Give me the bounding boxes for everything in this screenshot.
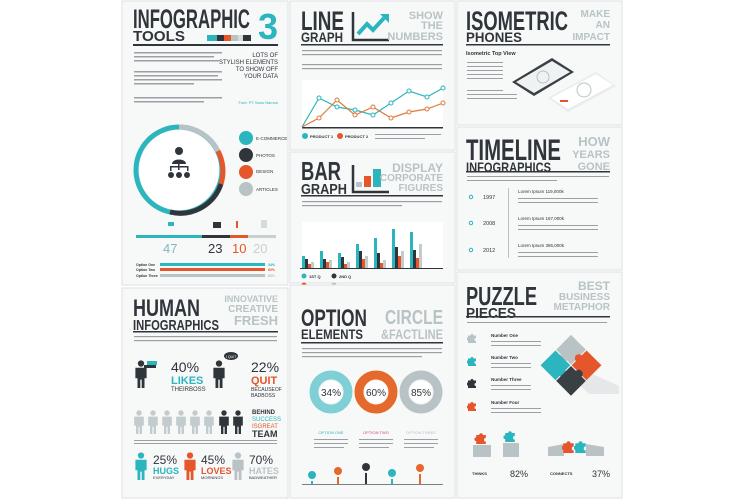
heading: &FACTLINE <box>381 326 443 342</box>
hands: connects: 37% <box>592 469 610 479</box>
panel: line graph <box>290 1 455 150</box>
panel: infographic tools <box>122 1 288 285</box>
heading: BUSINESS <box>559 292 610 303</box>
stat: quit <box>213 352 282 399</box>
heading: GRAPH <box>301 29 343 45</box>
option labels: OPTION THREE <box>406 430 436 435</box>
heading: OPTION <box>301 305 367 332</box>
heading: DISPLAY <box>392 161 443 175</box>
stats row: BADWEATHER <box>249 475 277 480</box>
stats row: MORNINGS <box>201 475 223 480</box>
timeline entries: Lorem Ipsum 187,000k <box>518 216 565 221</box>
stat: likes <box>135 359 206 393</box>
stats row: 70% <box>249 453 273 467</box>
stat bar <box>136 220 276 256</box>
heading: CORPORATE <box>380 173 443 184</box>
stat bar: 10 <box>232 241 246 256</box>
option bars: 85% <box>268 274 276 278</box>
stat: quit: QUIT <box>251 375 278 387</box>
heading: INFOGRAPHICS <box>133 317 219 334</box>
option labels <box>314 430 438 448</box>
timeline entries <box>469 188 598 258</box>
option bars <box>136 263 276 278</box>
heading <box>301 156 443 198</box>
heading <box>466 279 611 322</box>
heading: CIRCLE <box>385 307 443 329</box>
stat bar: 20 <box>253 241 267 256</box>
stat bar: 23 <box>208 241 222 256</box>
bar chart <box>300 222 443 269</box>
heading: PUZZLE <box>466 281 537 311</box>
stat: likes: 40% <box>171 359 199 375</box>
option bars: Option Three <box>136 274 158 278</box>
heading: IMPACT <box>572 32 610 43</box>
heading: INNOVATIVE <box>224 294 278 304</box>
legend: PRODUCT 2 <box>345 134 369 139</box>
heading: ELEMENTS <box>301 326 363 342</box>
title <box>133 4 278 47</box>
stats row: 25% <box>153 453 177 467</box>
hands: thinks: 82% <box>510 469 528 479</box>
team row: BEHIND <box>252 410 276 416</box>
color swatches <box>207 35 251 41</box>
stat: likes: LIKES <box>171 375 203 387</box>
stats row <box>135 452 279 480</box>
puzzle list: Number Four <box>491 400 519 405</box>
option bars: 34% <box>268 263 276 267</box>
heading: NUMBERS <box>387 31 443 43</box>
legend: PRODUCT 1 <box>310 134 334 139</box>
team row: ISGREAT <box>252 424 278 430</box>
heading <box>133 294 278 334</box>
heading: AN <box>596 20 610 31</box>
panel: isometric phones <box>457 1 622 125</box>
heading: PIECES <box>466 305 516 322</box>
donuts: 85% <box>411 388 431 399</box>
tagline: LOTS OF <box>252 53 278 59</box>
heading: METAPHOR <box>554 302 611 313</box>
heading: CREATIVE <box>228 304 278 315</box>
hands: connects: CONNECTS <box>550 471 573 476</box>
puzzle list: Number Three <box>491 377 522 382</box>
legend icons: ARTICLES <box>256 187 278 192</box>
heading: SHOW <box>409 10 444 22</box>
hands: thinks <box>472 431 528 479</box>
donuts: 34% <box>321 388 341 399</box>
hands: connects <box>548 441 610 479</box>
legend: 2ND Q <box>339 274 351 279</box>
big puzzle <box>540 327 632 419</box>
heading: FRESH <box>234 313 278 328</box>
team row: TEAM <box>252 429 278 439</box>
panel: timeline <box>457 127 622 270</box>
legend <box>302 274 351 288</box>
heading: HOW <box>578 134 611 149</box>
stats row: EVERYDAY <box>153 475 175 480</box>
title: 3 <box>258 6 278 47</box>
stat: likes: THEIRBOSS <box>171 387 206 393</box>
legend icons: DESIGN <box>256 169 273 174</box>
phones <box>512 58 616 112</box>
stat: quit: BECAUSEOF <box>251 387 282 393</box>
tagline: STYLISH ELEMENTS <box>219 60 278 66</box>
heading: FIGURES <box>399 183 443 194</box>
heading: ISOMETRIC <box>466 6 568 36</box>
panel: option elements <box>290 285 455 498</box>
stat bar: 47 <box>163 241 177 256</box>
heading: YEARS <box>572 149 610 161</box>
panel: isometric phones: Isometric Top View <box>466 51 516 57</box>
stat: quit: I QUIT <box>226 355 237 359</box>
legend icons: E-COMMERCE <box>256 136 287 141</box>
option labels: OPTION ONE <box>318 430 344 435</box>
option bars: Option One <box>136 263 155 267</box>
legend: 1ST Q <box>309 274 321 279</box>
puzzle list: Number Two <box>491 355 518 360</box>
puzzle list <box>466 333 541 413</box>
tagline: Font: PT Sans Narrow <box>238 100 278 105</box>
ring chart <box>136 127 223 213</box>
stats row: LOVES <box>201 466 232 476</box>
stats row: 45% <box>201 453 225 467</box>
heading: INFOGRAPHICS <box>466 159 551 175</box>
legend <box>302 133 441 139</box>
heading <box>301 6 444 45</box>
donuts <box>314 375 438 409</box>
stat: quit: 22% <box>251 359 279 375</box>
heading: MAKE <box>581 9 610 20</box>
option labels: OPTION TWO <box>363 430 389 435</box>
legend: 4TH Q <box>339 283 351 288</box>
line chart <box>302 80 445 128</box>
stat: quit: BADBOSS <box>251 393 276 399</box>
heading <box>301 305 443 342</box>
legend: 3RD Q <box>309 283 321 288</box>
legend icons <box>239 131 287 196</box>
timeline entries: 1997 <box>483 195 495 201</box>
heading: BAR <box>301 156 341 186</box>
hands: thinks: THINKS <box>472 471 487 476</box>
timeline entries: Lorem Ipsum 386,000k <box>518 243 565 248</box>
legend icons: PHOTOS <box>256 153 275 158</box>
tagline: YOUR DATA <box>244 74 278 80</box>
panel: puzzle pieces <box>457 272 632 498</box>
donuts: 60% <box>366 388 386 399</box>
option bars: 60% <box>268 268 276 272</box>
puzzle list: Number One <box>491 333 519 338</box>
timeline entries: Lorem Ipsum 119,000k <box>518 189 564 194</box>
timeline entries: 2012 <box>483 248 495 254</box>
heading: BEST <box>578 279 611 293</box>
option bars: Option Two <box>136 268 155 272</box>
tagline: TO SHOW OFF <box>236 67 278 73</box>
heading: LINE <box>301 6 344 36</box>
heading: TIMELINE <box>466 134 561 167</box>
heading: HUMAN <box>133 295 200 322</box>
panel: bar graph <box>290 152 455 288</box>
heading: PHONES <box>466 29 522 45</box>
tagline <box>219 53 278 105</box>
heading: GRAPH <box>301 181 347 198</box>
stats row: HUGS <box>153 466 179 476</box>
timeline entries: 2008 <box>483 221 495 227</box>
team row: SUCCESS <box>252 417 281 423</box>
heading: GONE <box>578 161 610 173</box>
title: INFOGRAPHIC <box>133 4 250 34</box>
factline <box>302 463 443 485</box>
panel: human infographics <box>122 288 288 498</box>
heading: THE <box>421 20 443 32</box>
body text <box>134 52 222 102</box>
team row <box>134 410 281 439</box>
title: TOOLS <box>133 28 185 45</box>
stats row: HATES <box>249 466 279 476</box>
